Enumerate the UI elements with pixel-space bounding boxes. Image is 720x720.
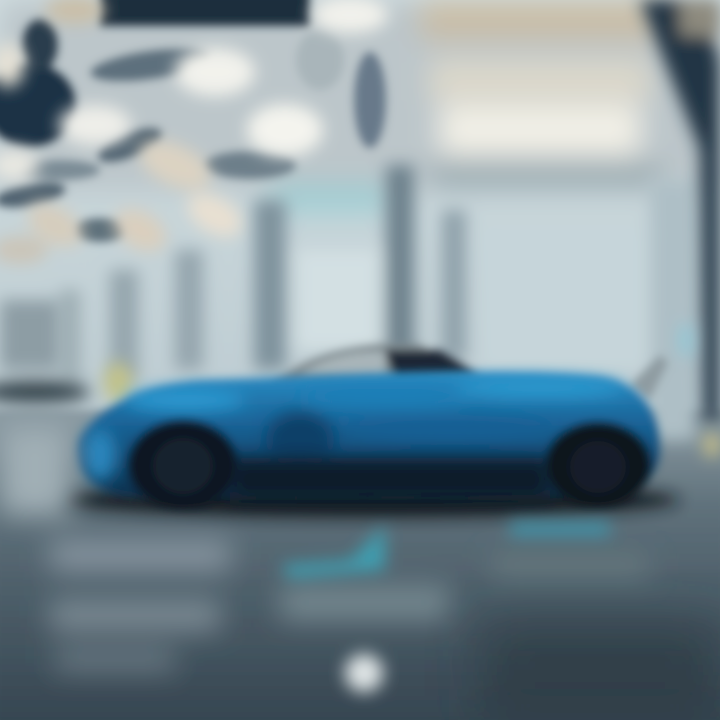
ceiling dark beams, left	[0, 0, 386, 242]
rear wheel	[546, 423, 650, 507]
car lower shadow	[230, 458, 550, 500]
front wheel	[129, 421, 237, 509]
car body	[77, 371, 660, 497]
body highlights	[84, 378, 625, 481]
cyan reflections	[280, 522, 610, 578]
ceiling	[0, 0, 720, 211]
dark floor corner	[480, 620, 720, 720]
glowing white dot	[345, 654, 383, 692]
car shadow	[60, 482, 680, 518]
car	[60, 344, 680, 518]
dark column, top right	[640, 0, 720, 420]
pillars and wall panels	[60, 165, 695, 440]
floor reflections	[0, 425, 650, 670]
car roof and windows	[270, 344, 668, 400]
yellow and cyan accents	[104, 325, 720, 457]
dark floor-line on the left	[0, 300, 90, 404]
background wall	[0, 0, 720, 440]
ceiling bright patches, left	[0, 0, 388, 264]
floor	[0, 410, 720, 720]
